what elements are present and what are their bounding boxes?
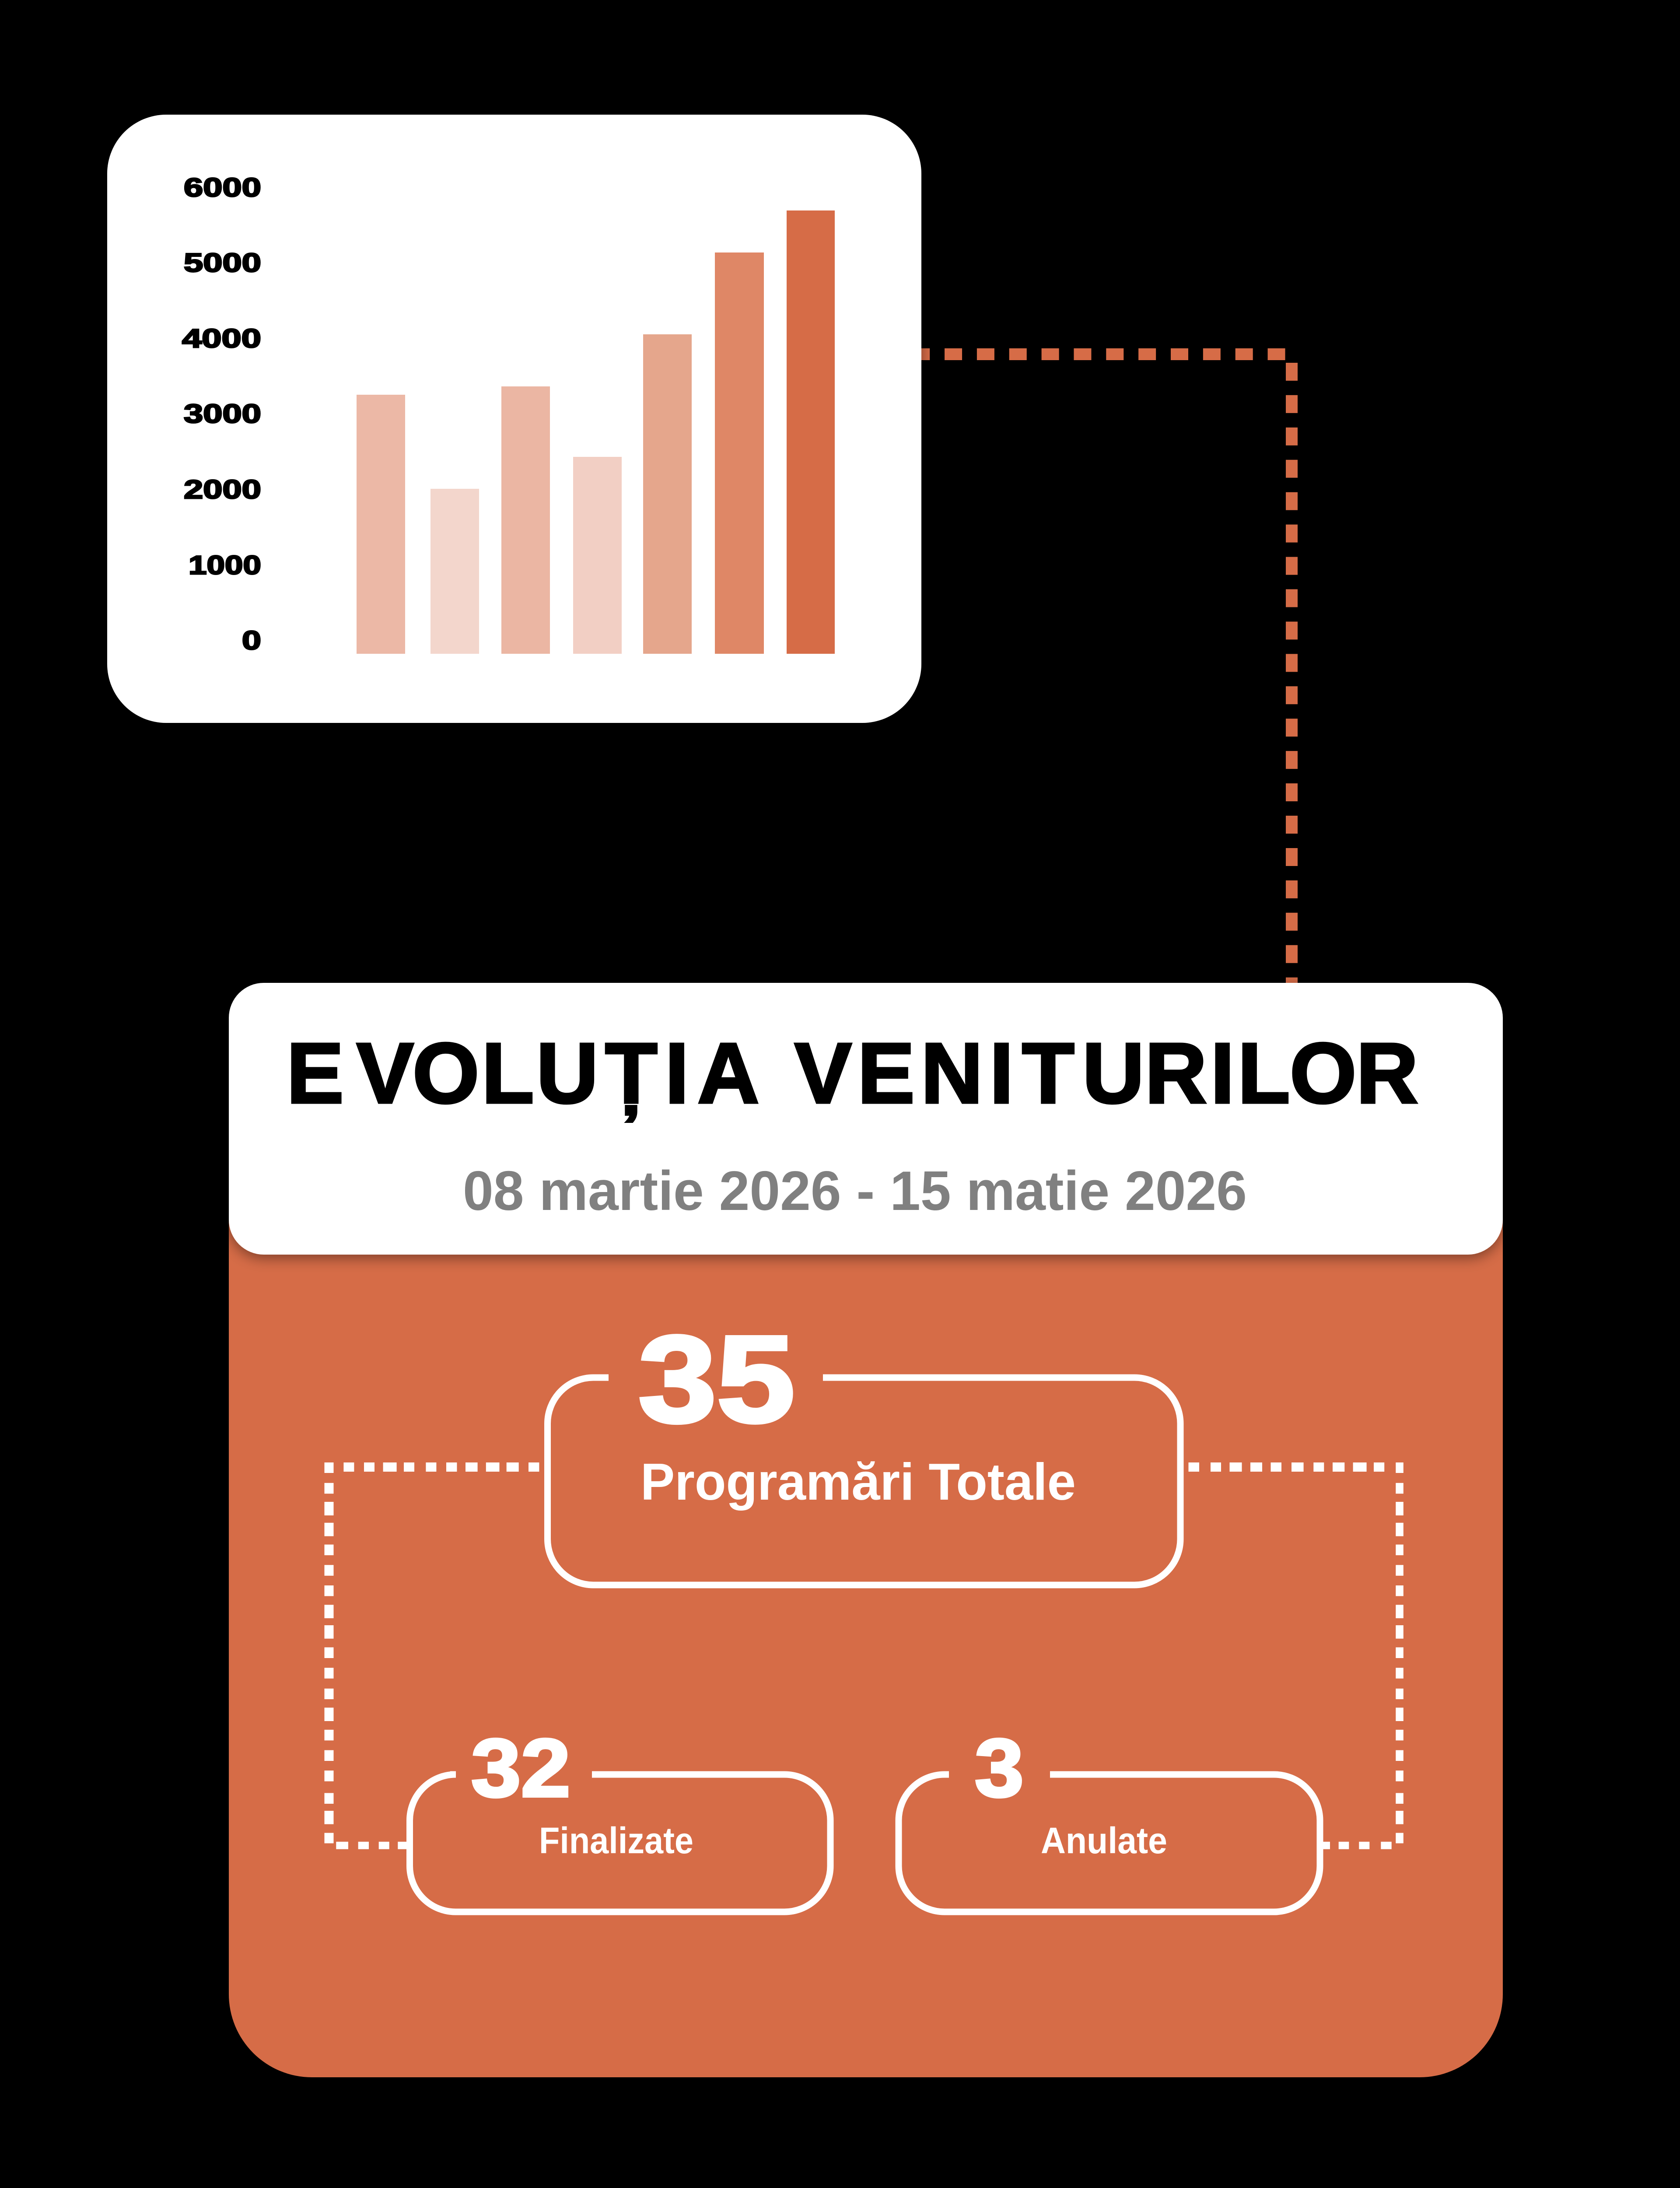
y axis labels: 2000 [184, 475, 261, 504]
y axis labels [182, 173, 261, 655]
number 3: 3 [975, 1722, 1024, 1814]
title: EVOLUȚIA VENITURILOR [287, 1025, 1418, 1122]
panel: bar chart card [107, 115, 921, 723]
stat box: total appointments [548, 1310, 1180, 1585]
number 35: 35 [638, 1310, 795, 1448]
bars [357, 210, 835, 654]
label: cancelled: Anulate [1041, 1820, 1167, 1861]
stat box: cancelled [899, 1722, 1320, 1912]
dashed connector: right branch [1188, 1462, 1404, 1849]
label: completed: Finalizate [539, 1820, 693, 1861]
dashed connector: left branch [325, 1462, 539, 1849]
label: total appointments: Programări Totale [640, 1453, 1076, 1511]
y axis labels: 1000 [189, 551, 261, 580]
y axis labels: 5000 [184, 248, 261, 277]
stat box: completed [410, 1722, 830, 1912]
y axis labels: 6000 [184, 173, 261, 202]
panel: summary background [229, 1094, 1503, 2077]
number 32: 32 [471, 1722, 570, 1814]
y axis labels: 3000 [184, 399, 261, 428]
y axis labels: 0 [242, 626, 261, 655]
y axis labels: 4000 [182, 324, 261, 353]
panel: title card [229, 983, 1503, 1255]
dashed connector: chart to summary panel [912, 354, 1292, 985]
date range subtitle: 08 martie 2026 - 15 matie 2026 [463, 1160, 1247, 1222]
